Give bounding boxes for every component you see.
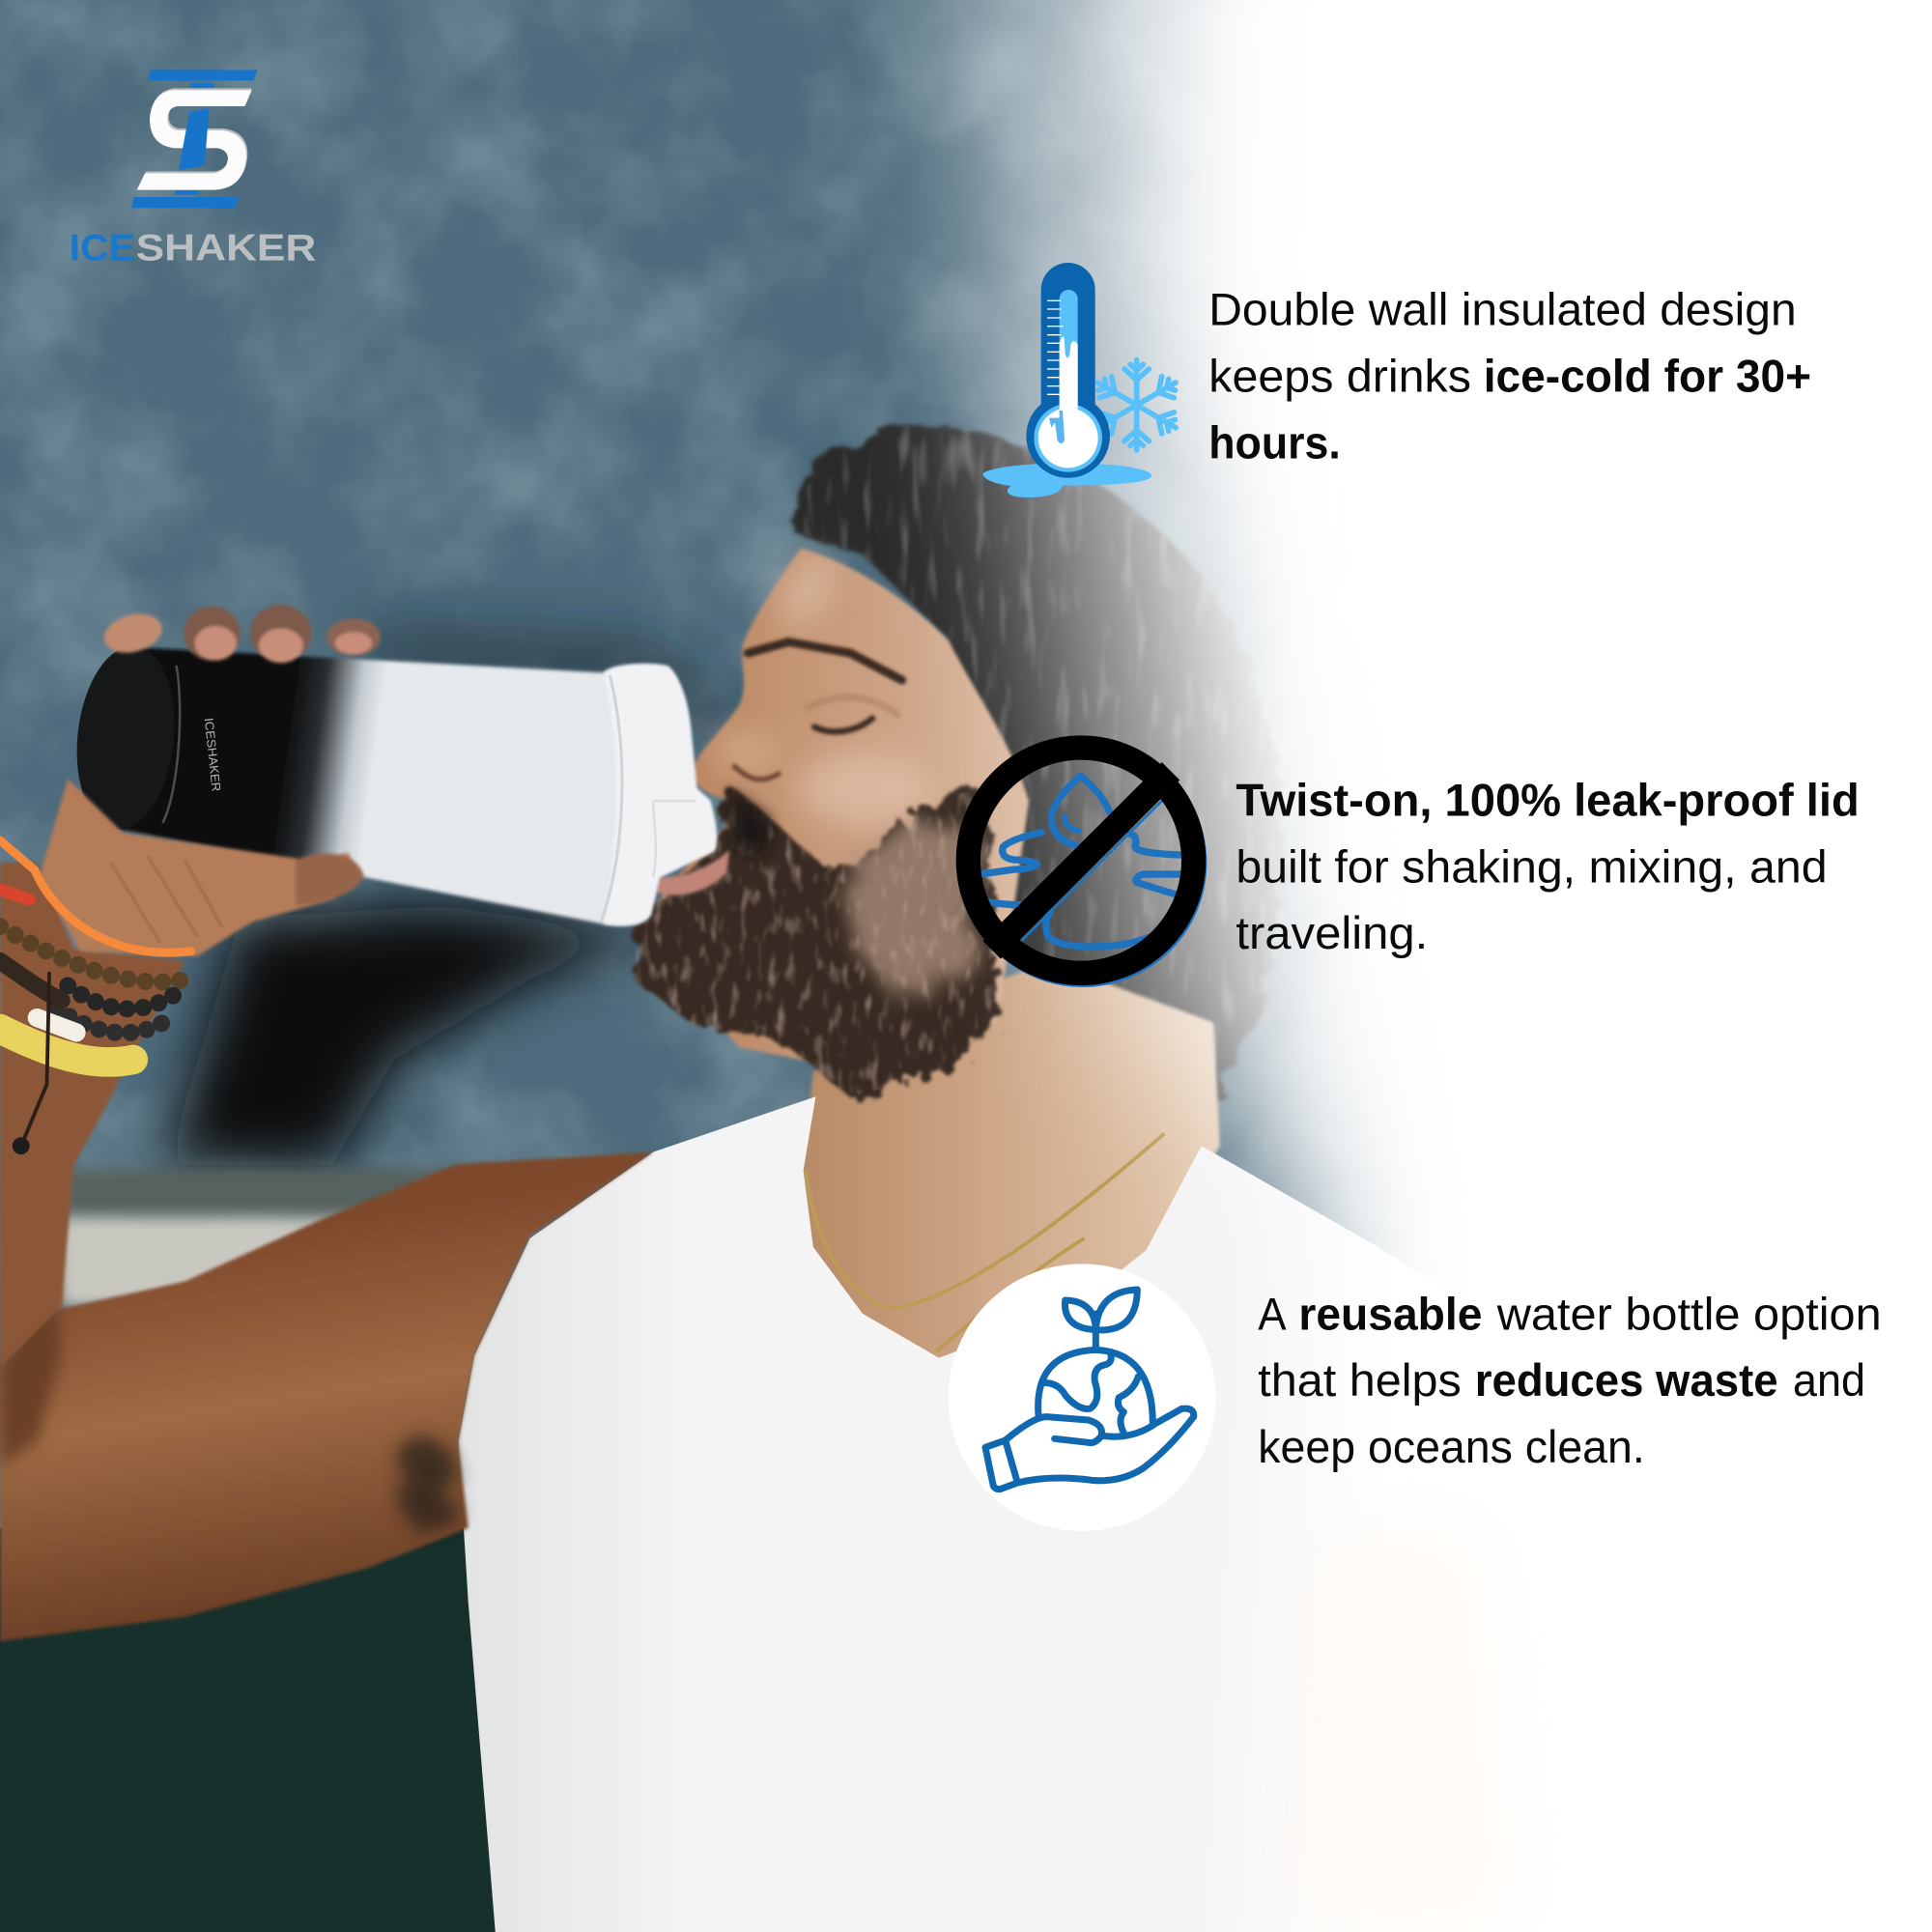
text block: reusable: reduces waste bbox=[1475, 1355, 1778, 1406]
text block: reusable bbox=[1258, 1289, 1882, 1473]
icon: melting thermometer with snowflake bbox=[982, 263, 1181, 497]
raised upper arm bbox=[0, 1152, 653, 1641]
bottle wordmark: ICESHAKER bbox=[202, 717, 224, 792]
prohibition ring bbox=[968, 748, 1194, 973]
thermometer body bbox=[1026, 263, 1110, 478]
bottle shadow on wall bbox=[166, 905, 653, 1164]
inner blue edge bbox=[979, 758, 1183, 963]
photo: man drinking from bottle bbox=[0, 0, 1454, 1932]
logo S mark bbox=[137, 90, 252, 190]
bottle cap bbox=[69, 641, 184, 835]
text block: reusable: that helps bbox=[1258, 1355, 1462, 1406]
underarm shadow bbox=[399, 1435, 458, 1534]
wrist bbox=[0, 863, 185, 1368]
beard bbox=[635, 788, 998, 1096]
text block: leak-proof lid: traveling. bbox=[1236, 908, 1428, 959]
white fog overlay bbox=[880, 0, 1932, 1932]
necklace bbox=[806, 1133, 1164, 1351]
eye and brow bbox=[734, 642, 902, 780]
text block: insulation bbox=[1208, 285, 1811, 469]
dangling bead bbox=[13, 1137, 30, 1154]
text block: reusable: and bbox=[1793, 1355, 1865, 1406]
logo: Iceshaker bbox=[70, 70, 316, 269]
logo centre stripe bbox=[179, 108, 210, 170]
logo bottom bar bbox=[131, 197, 239, 208]
logo wordmark: ICE bbox=[70, 227, 135, 269]
thermometer tube bbox=[1060, 290, 1078, 418]
blue bar edge bbox=[1021, 800, 1163, 941]
logo top bar bbox=[148, 70, 258, 80]
text block: reusable: water bottle option bbox=[1496, 1289, 1882, 1340]
bench and floor bbox=[0, 1168, 702, 1932]
hand holding bottle bbox=[40, 605, 381, 956]
text block: leak-proof lid bbox=[1236, 775, 1860, 959]
icon: no leaks bbox=[960, 741, 1205, 985]
melting ice bbox=[1060, 336, 1078, 422]
thermometer bulb bbox=[1034, 404, 1102, 472]
water and hands line art bbox=[980, 776, 1181, 947]
white disc bbox=[949, 1264, 1215, 1531]
text block: insulation: ice-cold for 30+ bbox=[1484, 352, 1811, 403]
logo wordmark bbox=[70, 227, 316, 269]
snowflake bbox=[1092, 360, 1181, 450]
line art bbox=[985, 1290, 1194, 1490]
puddle bbox=[982, 463, 1151, 497]
bracelets bbox=[0, 840, 191, 1144]
neck and chest bbox=[795, 961, 1220, 1361]
text block: leak-proof lid: Twist-on, 100% leak-proof lid bbox=[1236, 775, 1860, 826]
text block: insulation: Double wall insulated design bbox=[1208, 285, 1797, 336]
shaker bottle bbox=[69, 641, 716, 925]
prohibition bar bbox=[992, 771, 1171, 950]
text block: leak-proof lid: built for shaking, mixing, and bbox=[1236, 841, 1828, 893]
logo tabs bbox=[175, 83, 214, 195]
face highlights bbox=[714, 546, 930, 826]
elbow shading bbox=[0, 1257, 62, 1466]
icon: hand holding earth with sprout bbox=[949, 1264, 1215, 1531]
text block: reusable: A bbox=[1258, 1289, 1287, 1340]
face bbox=[640, 549, 1029, 1072]
text block: insulation: hours. bbox=[1208, 417, 1341, 469]
lips bbox=[656, 850, 729, 895]
thermometer ticks bbox=[1047, 300, 1064, 394]
white sleeveless shirt bbox=[458, 1096, 1552, 1932]
logo S mark shadow bbox=[138, 88, 252, 188]
logo wordmark: SHAKER bbox=[136, 227, 316, 269]
hair bbox=[791, 425, 1284, 1140]
warm glow lower right bbox=[1282, 1528, 1516, 1932]
text block: reusable: reusable bbox=[1298, 1289, 1482, 1340]
blue outline bbox=[960, 741, 1205, 985]
text block: insulation: keeps drinks bbox=[1208, 352, 1471, 403]
text block: reusable: keep oceans clean. bbox=[1258, 1422, 1645, 1473]
hand creases bbox=[111, 856, 222, 943]
